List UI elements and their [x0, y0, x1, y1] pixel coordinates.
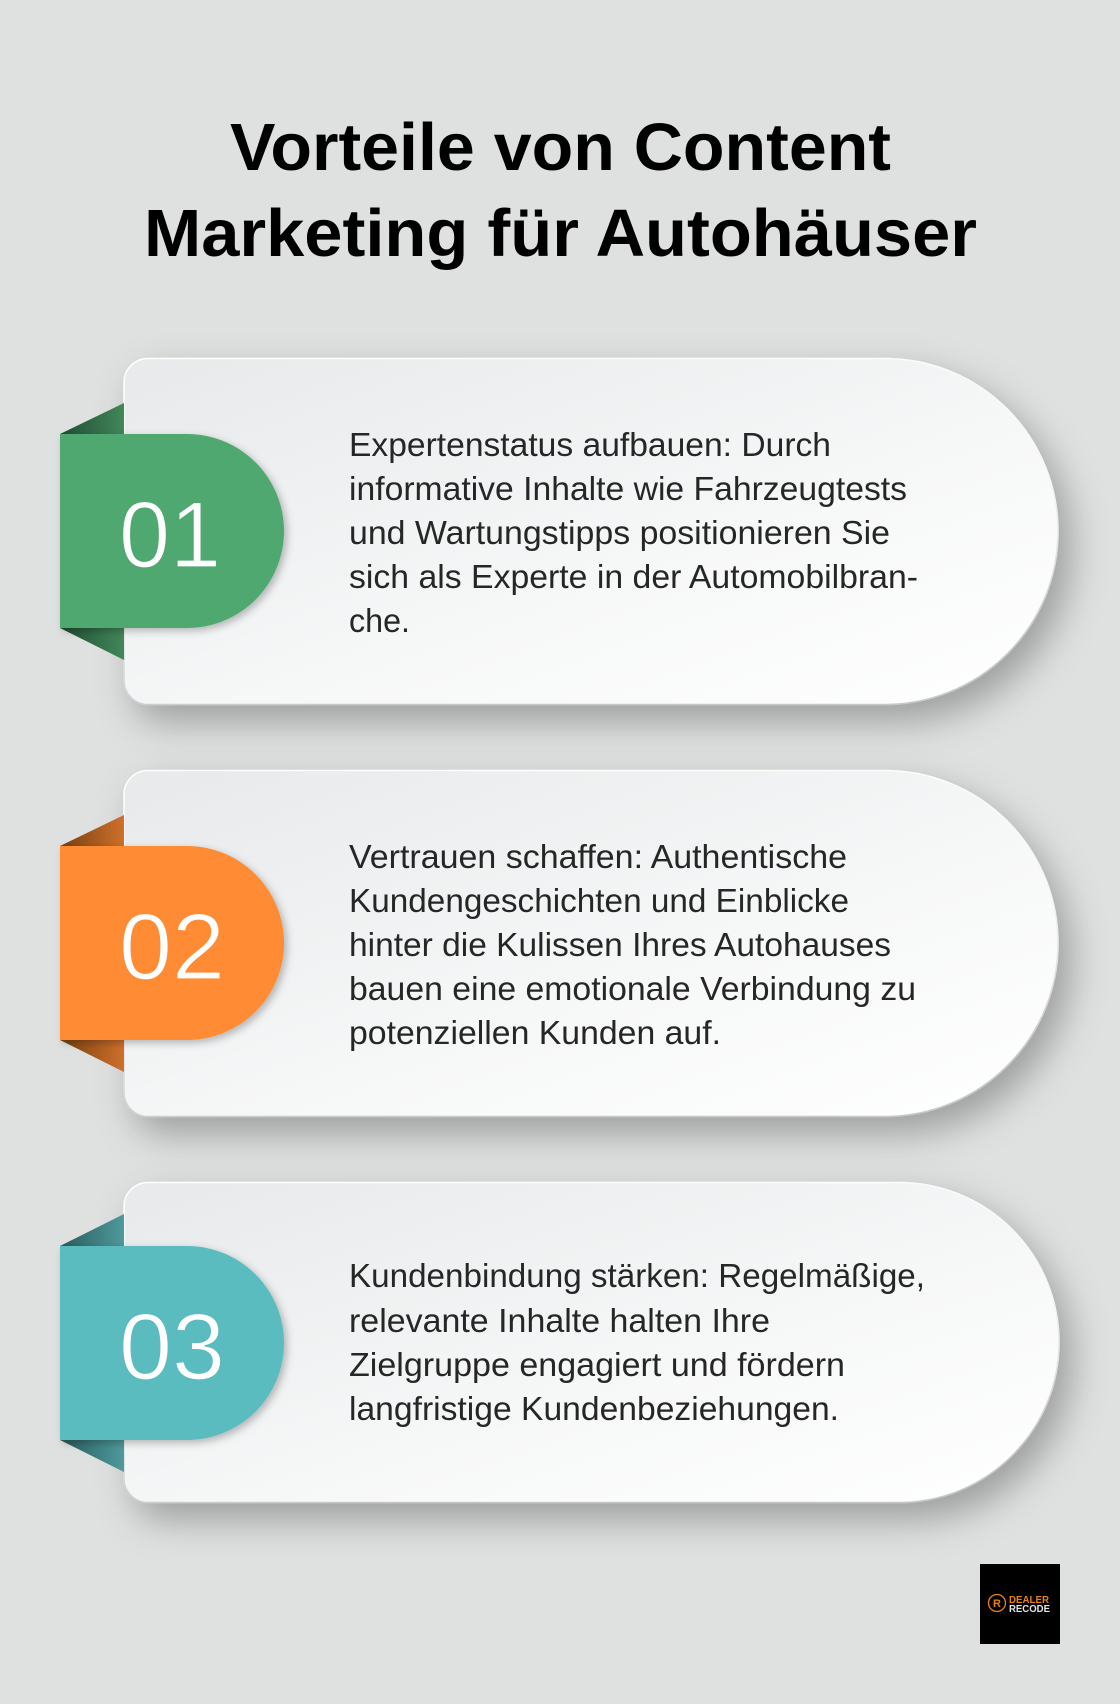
- text block 03: Zielgruppe engagiert und fördern: [349, 1347, 845, 1384]
- title: [144, 110, 977, 271]
- number badge 01: 01: [119, 482, 221, 587]
- card 03: [124, 1182, 1059, 1502]
- icon: R in circle: R: [993, 1598, 1001, 1610]
- logo: Dealer Recode: RECODE: [1009, 1604, 1050, 1615]
- title: Marketing für Autohäuser: [144, 196, 977, 271]
- logo: Dealer Recode: [980, 1564, 1060, 1644]
- text block 01: sich als Experte in der Automobilbran-: [349, 559, 918, 596]
- number badge 03: 03: [119, 1294, 225, 1399]
- text block 01: und Wartungstipps positionieren Sie: [349, 515, 890, 552]
- text block 03: [349, 1258, 925, 1428]
- text block 02: potenziellen Kunden auf.: [349, 1015, 721, 1052]
- panel: step 01: [60, 358, 1058, 704]
- title: Vorteile von Content: [230, 110, 891, 185]
- text block 03: relevante Inhalte halten Ihre: [349, 1303, 770, 1340]
- number badge 01: [60, 434, 284, 628]
- ribbon fold bottom 02: [60, 1040, 124, 1072]
- text block 02: [349, 839, 916, 1052]
- text block 03: langfristige Kundenbeziehungen.: [349, 1391, 839, 1428]
- panel: step 02: [60, 770, 1058, 1116]
- logo: Dealer Recode: DEALER: [1009, 1595, 1050, 1606]
- ribbon fold bottom 01: [60, 628, 124, 660]
- text block 01: che.: [349, 603, 410, 640]
- ribbon fold top 03: [60, 1214, 124, 1246]
- text block 02: Vertrauen schaffen: Authentische: [349, 839, 847, 876]
- text block 01: informative Inhalte wie Fahrzeugtests: [349, 471, 907, 508]
- ribbon fold top 01: [60, 403, 124, 434]
- number badge 02: [60, 846, 284, 1040]
- text block 02: hinter die Kulissen Ihres Autohauses: [349, 927, 891, 964]
- card 02: [124, 770, 1058, 1116]
- panel: step 03: [60, 1182, 1059, 1502]
- card 01: [124, 358, 1058, 704]
- text block 01: Expertenstatus aufbauen: Durch: [349, 427, 831, 464]
- text block 01: [349, 427, 918, 640]
- ribbon fold bottom 03: [60, 1440, 124, 1472]
- text block 02: Kundengeschichten und Einblicke: [349, 883, 849, 920]
- number badge 03: [60, 1246, 284, 1440]
- text block 02: bauen eine emotionale Verbindung zu: [349, 971, 916, 1008]
- ribbon fold top 02: [60, 815, 124, 846]
- number badge 02: 02: [119, 894, 225, 999]
- text block 03: Kundenbindung stärken: Regelmäßige,: [349, 1258, 925, 1295]
